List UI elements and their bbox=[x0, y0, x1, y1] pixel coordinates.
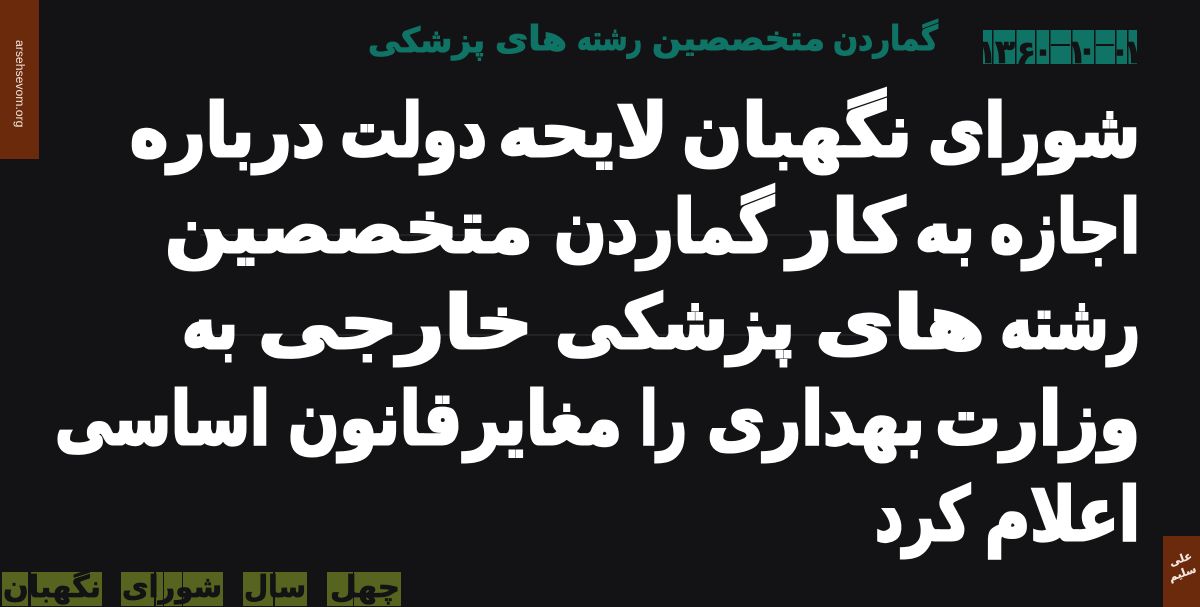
subtitle: رشته bbox=[577, 19, 642, 59]
panel: signature tab: علی bbox=[1167, 549, 1194, 569]
headline line 2: کار bbox=[784, 184, 905, 270]
date badge: ۶ bbox=[1016, 33, 1036, 72]
headline line 4: را bbox=[640, 376, 687, 462]
footer series title bbox=[2, 569, 401, 606]
date badge: ۱ bbox=[977, 32, 997, 71]
subtitle: متخصصین bbox=[652, 19, 825, 59]
footer series title: نگهبان bbox=[3, 569, 101, 605]
subtitle: گماردن bbox=[833, 19, 938, 59]
headline line 2 bbox=[165, 184, 1140, 270]
subtitle bbox=[368, 19, 938, 61]
date badge: ۰ bbox=[1110, 31, 1130, 70]
headline line 1: نگهبان bbox=[682, 88, 912, 174]
subtitle: پزشکی bbox=[368, 21, 485, 61]
footer series title: چهل bbox=[330, 570, 400, 605]
headline line 3: خارجی bbox=[258, 280, 533, 366]
footer series title: شورای bbox=[122, 570, 222, 605]
headline line 1: دولت bbox=[340, 88, 487, 174]
panel: signature tab bbox=[1162, 536, 1200, 607]
headline line 5: اعلام bbox=[985, 472, 1140, 558]
headline line 5 bbox=[875, 472, 1140, 558]
headline line 2: به bbox=[915, 184, 975, 270]
date badge: ۱ bbox=[1123, 32, 1143, 71]
date badge: ۳ bbox=[995, 32, 1015, 71]
headline line 4: اساسی bbox=[55, 376, 270, 462]
headline line 4: بهداری bbox=[707, 376, 925, 462]
panel: site tab with url bbox=[0, 0, 39, 159]
date badge bbox=[977, 30, 1143, 72]
headline line 1 bbox=[130, 88, 1140, 174]
headline line 2: متخصصین bbox=[165, 184, 533, 270]
headline line 4 bbox=[55, 376, 1140, 462]
headline line 1: درباره bbox=[130, 88, 325, 174]
date badge: ۱ bbox=[1067, 32, 1087, 71]
headline bbox=[55, 88, 1140, 558]
date badge: ۰ bbox=[1033, 31, 1053, 70]
headline line 3: پزشکی bbox=[555, 280, 795, 366]
headline line 4: قانون bbox=[288, 376, 462, 462]
subtitle: های bbox=[495, 19, 567, 59]
headline line 2: گماردن bbox=[554, 184, 774, 270]
headline line 3: به bbox=[182, 280, 238, 366]
date badge: ۰ bbox=[1077, 30, 1097, 69]
headline line 1: لایحه bbox=[498, 88, 668, 174]
panel: signature tab: سلیم bbox=[1167, 562, 1198, 584]
headline line 4: مغایر bbox=[462, 376, 622, 462]
headline line 3: های bbox=[815, 280, 985, 366]
headline line 3 bbox=[182, 280, 1140, 366]
footer series title: سال bbox=[244, 570, 306, 605]
panel: site tab with url: arsehsevom.org bbox=[13, 40, 27, 127]
headline line 5: کرد bbox=[875, 472, 970, 558]
headline line 4: وزارت bbox=[935, 376, 1140, 462]
